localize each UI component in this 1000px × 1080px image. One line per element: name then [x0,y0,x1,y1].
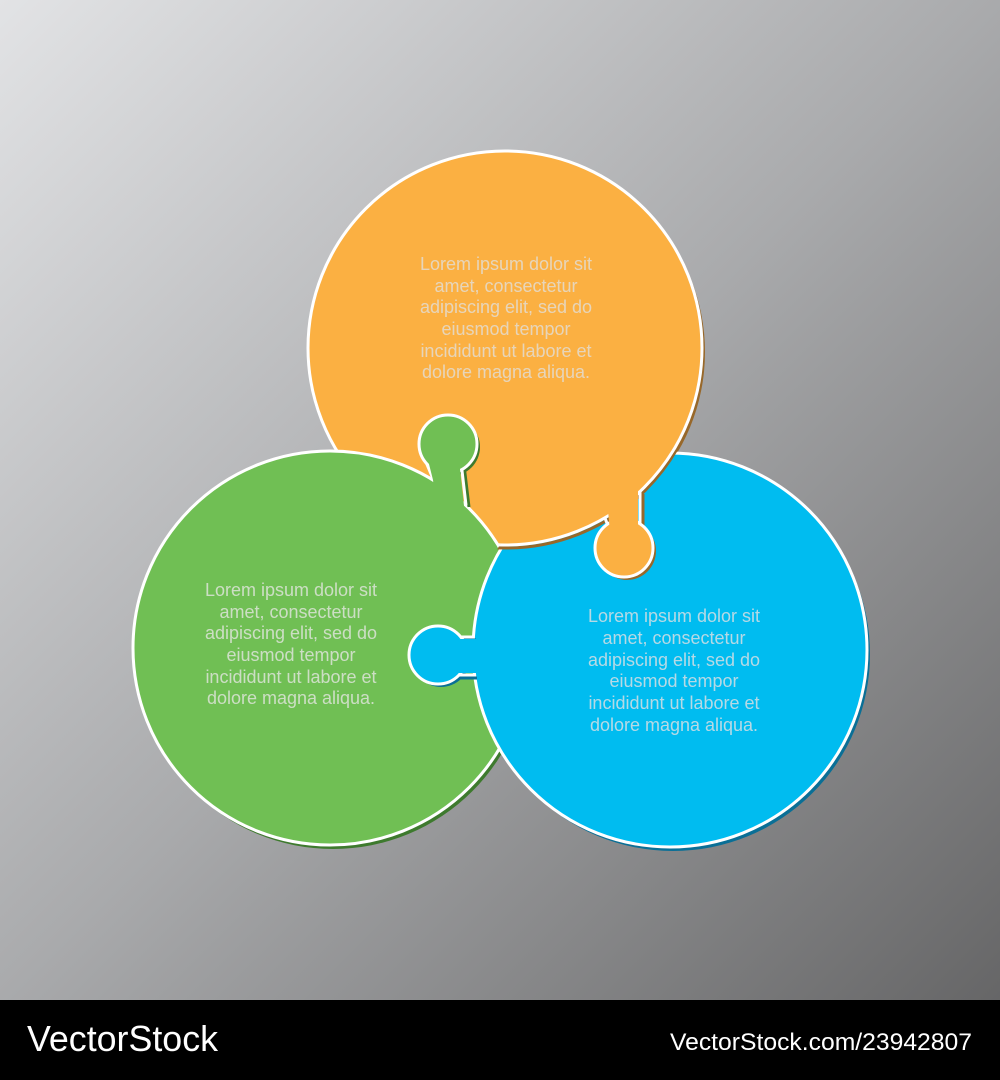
text: blue: adipiscing elit, sed do [588,650,760,670]
text: blue: dolore magna aliqua. [590,715,758,735]
text: orange: Lorem ipsum dolor sit [420,254,592,274]
text: green: dolore magna aliqua. [207,688,375,708]
footer bar [0,1000,1000,1080]
text: blue: Lorem ipsum dolor sit [588,606,760,626]
text: green [205,580,377,708]
text: orange [420,254,592,382]
piece: orange [308,151,702,545]
footer logo: VectorStock [27,1018,219,1059]
tab: orange into blue [595,490,656,580]
piece: blue [473,453,867,847]
text: blue: amet, consectetur [602,628,746,648]
puzzle diagram [133,151,870,851]
piece: green [133,451,527,845]
text: green: eiusmod tempor [226,645,356,665]
tab: green into orange [419,415,480,507]
text: orange: amet, consectetur [434,276,578,296]
text: orange: eiusmod tempor [441,319,571,339]
text: orange: adipiscing elit, sed do [420,297,592,317]
text: green: adipiscing elit, sed do [205,623,377,643]
orange over blue region [497,450,678,550]
text: blue [588,606,760,735]
tab: blue into green [409,626,492,687]
shadows [136,155,870,851]
footer url: VectorStock.com/23942807 [670,1029,972,1056]
text: orange: incididunt ut labore et [420,341,592,361]
text: blue: incididunt ut labore et [588,693,760,713]
text: green: Lorem ipsum dolor sit [205,580,377,600]
text: blue: eiusmod tempor [609,671,739,691]
text: green: amet, consectetur [219,602,363,622]
text: green: incididunt ut labore et [205,667,377,687]
text: orange: dolore magna aliqua. [422,362,590,382]
